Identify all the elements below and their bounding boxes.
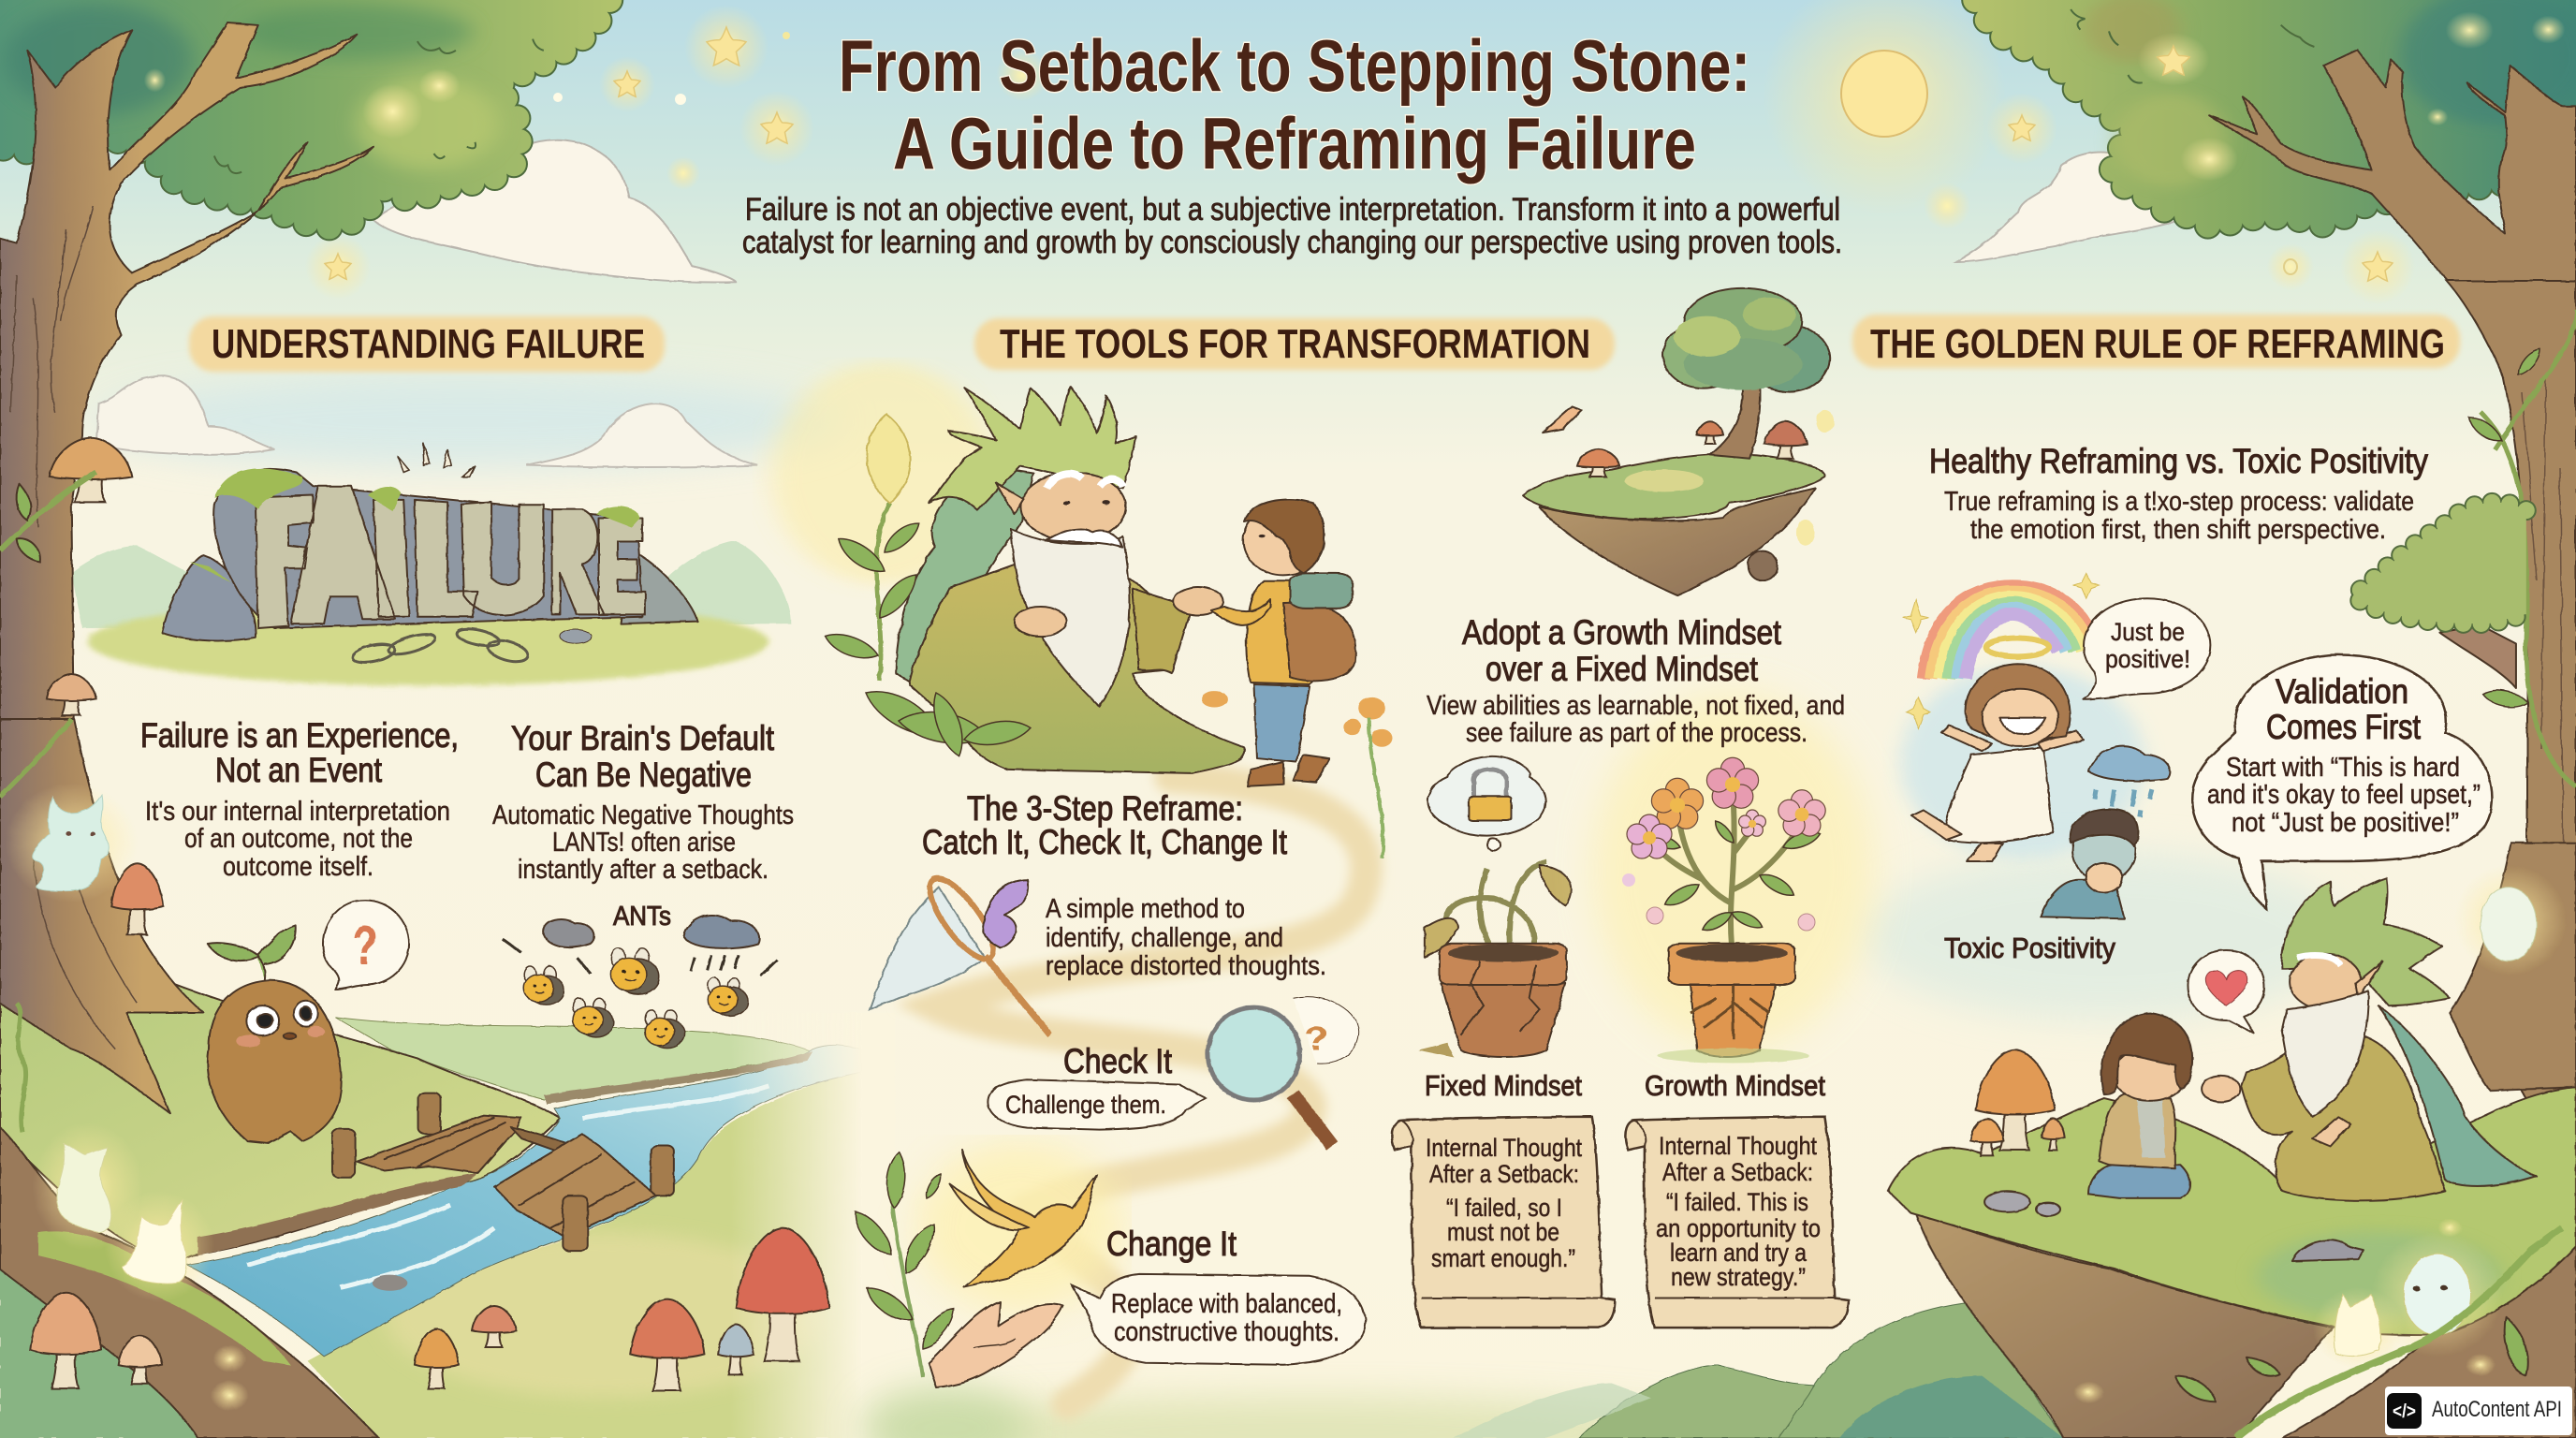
text block: your brain's default: LANTs! often arise (552, 828, 736, 858)
tree root behind (2450, 843, 2576, 1091)
child with backpack (1247, 580, 1326, 684)
text block: healthy reframing vs toxic positivity: True reframing is a t!xo-step process: validate (1944, 487, 2414, 517)
sprite on tree (2455, 865, 2567, 976)
text block: your brain's default: Automatic Negative Thoughts (492, 800, 794, 830)
text block: simple method: A simple method to (1046, 894, 1245, 924)
badge: AutoContent API: </> (2393, 1401, 2416, 1422)
title (839, 24, 1750, 184)
stars and sparkles (305, 5, 2415, 304)
illustrations: net and magnifier (870, 874, 1359, 1146)
label: change it: Change It (1106, 1225, 1237, 1263)
right grass bank (308, 1067, 861, 1438)
rainbow (1924, 586, 2097, 679)
vines (2236, 1227, 2562, 1438)
label: check it (1005, 1042, 1173, 1119)
validation bubble (2192, 654, 2492, 909)
scroll text: fixed mindset thought: smart enough.” (1431, 1244, 1575, 1272)
text block: the 3-step reframe: Catch It, Check It, Change It (922, 823, 1288, 861)
left grass bank (0, 980, 560, 1259)
text block: your brain's default: instantly after a setback. (518, 855, 768, 885)
bubble text: validation comes first: not “Just be positive!” (2232, 808, 2459, 838)
labels: fixed and growth mindset (1425, 1069, 1825, 1102)
cliff rock (1916, 1213, 2333, 1438)
text block: failure is an experience: of an outcome, not the (184, 824, 413, 854)
scroll text: growth mindset thought: learn and try a (1670, 1239, 1808, 1267)
subtitle (742, 192, 1842, 260)
scroll text: growth mindset thought: new strategy.” (1671, 1263, 1806, 1291)
scroll text: fixed mindset thought: After a Setback: (1429, 1160, 1579, 1188)
title: A Guide to Reframing Failure (893, 102, 1696, 184)
soft fade of scene into parchment (730, 1012, 895, 1438)
vine (0, 719, 71, 1132)
text block: failure is an experience (140, 716, 459, 882)
subtitle: Failure is not an objective event, but a subjective interpretation. Transform it into a powerful (745, 192, 1840, 227)
text block: simple method: replace distorted thoughts. (1046, 951, 1326, 981)
heading: understanding failure (189, 316, 665, 372)
bubble text: validation comes first (2207, 672, 2481, 838)
text block: healthy reframing vs toxic positivity: the emotion first, then shift perspective. (1970, 515, 2386, 545)
scroll text: growth mindset thought: “I failed. This is (1666, 1188, 1808, 1216)
left tree foliage (0, 0, 609, 227)
heading: the golden rule of reframing: THE GOLDEN RULE OF REFRAMING (1870, 321, 2445, 367)
text block: adopt a growth mindset: Adopt a Growth Mindset (1462, 613, 1782, 652)
panel: understanding failure scene with river (0, 719, 895, 1438)
bubble: challenge them (988, 1079, 1206, 1130)
label: check it: Check It (1063, 1042, 1173, 1080)
text block: failure is an experience: Not an Event (215, 751, 383, 789)
label: change it (1106, 1225, 1342, 1347)
bubble text: validation comes first: Comes First (2266, 708, 2422, 746)
text block: simple method (1046, 894, 1326, 981)
text block: your brain's default: Can Be Negative (535, 756, 752, 794)
label: change it: Replace with balanced, (1111, 1289, 1342, 1319)
scroll text: fixed mindset thought: “I failed, so I (1446, 1194, 1562, 1222)
heart speech bubble (2188, 950, 2264, 1034)
butterfly net (870, 888, 985, 1009)
bubble text: just be positive: positive! (2105, 645, 2190, 673)
text block: your brain's default: Your Brain's Default (511, 719, 775, 757)
seated sad child (2088, 1165, 2190, 1198)
heading: understanding failure: UNDERSTANDING FAILURE (212, 321, 645, 367)
bees: ANTs (503, 915, 777, 1049)
illustration: locked thought bubble (1427, 756, 1545, 851)
scroll text: fixed mindset thought: must not be (1447, 1218, 1559, 1246)
scroll: growth mindset (1625, 1117, 1848, 1328)
clouds (96, 139, 758, 467)
soft green wash along bottom centre (861, 1386, 1741, 1438)
cliff mushrooms (1976, 1050, 2055, 1150)
bubble: replace thoughts (1072, 1274, 1366, 1365)
text block: adopt a growth mindset (1427, 613, 1845, 748)
guide robe (2378, 1005, 2537, 1186)
glowing egg sprite (2371, 1231, 2503, 1357)
rocks (1984, 1192, 2030, 1212)
illustration: growth mindset flowering plant (1593, 693, 1874, 1049)
bubble text: validation comes first: and it's okay to feel upset,” (2207, 780, 2481, 810)
magnifier (1294, 997, 1359, 1064)
cliff scene with guide and child (1778, 843, 2576, 1438)
root and moss (0, 1269, 198, 1438)
river (186, 1045, 861, 1357)
label: check it: Challenge them. (1005, 1091, 1166, 1119)
tree trunk roots (0, 719, 203, 1113)
right small tree (2353, 503, 2526, 688)
text block: failure is an experience: outcome itself. (223, 852, 373, 882)
sun (1763, 0, 2006, 215)
title: From Setback to Stepping Stone: (839, 24, 1750, 107)
speech bubble with question mark (323, 900, 409, 990)
scroll text: fixed mindset thought (1426, 1134, 1582, 1272)
distant hill (335, 1017, 812, 1100)
mushrooms (111, 863, 164, 934)
illustration: fixed mindset wilted plant (1418, 861, 1571, 1058)
panel: tools for transformation path (936, 777, 1367, 1404)
scroll text: fixed mindset thought: Internal Thought (1426, 1134, 1582, 1162)
text block: adopt a growth mindset: see failure as part of the process. (1466, 718, 1808, 748)
label: change it: constructive thoughts. (1114, 1317, 1339, 1347)
text block: the 3-step reframe (922, 789, 1288, 861)
labels: fixed and growth mindset: Growth Mindset (1645, 1069, 1825, 1102)
bubble text: validation comes first: Start with “This is hard (2226, 753, 2460, 783)
text block: adopt a growth mindset: over a Fixed Mindset (1486, 650, 1759, 688)
sad boy crying (2041, 809, 2138, 918)
text block: the 3-step reframe: The 3-Step Reframe: (967, 789, 1243, 828)
speech bubbles and scroll papers (988, 1079, 1853, 1438)
labels: fixed and growth mindset: Fixed Mindset (1425, 1069, 1582, 1102)
text block: simple method: identify, challenge, and (1046, 923, 1283, 953)
bubble: just be positive (2083, 598, 2211, 699)
rain cloud (2088, 746, 2170, 781)
sparkles (1903, 573, 2099, 728)
scroll text: growth mindset thought: Internal Thought (1659, 1132, 1817, 1160)
text block: healthy reframing vs toxic positivity (1929, 442, 2428, 545)
illustrations: net and magnifier: ? (1304, 1020, 1329, 1058)
illustration: floating island with tree (1523, 288, 1835, 595)
left tree trunk (0, 22, 373, 719)
badge: AutoContent API (2385, 1387, 2572, 1435)
panel: toxic positivity illustration (1900, 573, 2492, 909)
text block: failure is an experience: Failure is an Experience, (140, 716, 459, 755)
character: worried seed creature (208, 925, 342, 1143)
text block: your brain's default (492, 719, 794, 885)
text block: adopt a growth mindset: View abilities as learnable, not fixed, and (1427, 691, 1845, 721)
text block: healthy reframing vs toxic positivity: Healthy Reframing vs. Toxic Positivity (1929, 442, 2428, 480)
grass top (1888, 1087, 2576, 1335)
background bushes (1778, 1301, 2063, 1438)
glowing forest sprites (6, 784, 138, 902)
subtitle: catalyst for learning and growth by consciously changing our perspective using proven tools. (742, 225, 1842, 260)
plant leaves around guide (822, 518, 1032, 759)
right tree trunk lower (2447, 281, 2576, 1180)
girl (1986, 638, 2049, 656)
label: ANTs: ANTs (613, 902, 671, 932)
illustration: golden bird, leafy sprig and open hand (847, 1142, 1123, 1387)
panel: understanding failure scene with river: ? (352, 916, 378, 976)
illustration: failure stone letters (71, 443, 791, 685)
scroll text: growth mindset thought: After a Setback: (1662, 1158, 1813, 1186)
bridge: broken wooden planks (332, 1093, 674, 1251)
bubble text: just be positive (2105, 618, 2190, 673)
bubble text: just be positive: Just be (2111, 618, 2185, 646)
bubble text: validation comes first: Validation (2276, 672, 2408, 711)
scroll text: growth mindset thought: an opportunity to (1656, 1214, 1821, 1242)
illustration: old forest guide with child (771, 362, 1392, 858)
right tree trunk upper and foliage (1975, 0, 2576, 374)
scroll: fixed mindset (1392, 1117, 1615, 1328)
scroll text: growth mindset thought (1656, 1132, 1821, 1291)
heading: the tools for transformation: THE TOOLS FOR TRANSFORMATION (1000, 321, 1590, 367)
label: toxic positivity: Toxic Positivity (1944, 932, 2115, 964)
text block: failure is an experience: It's our internal interpretation (145, 797, 450, 827)
lower bush (1579, 1365, 1853, 1438)
